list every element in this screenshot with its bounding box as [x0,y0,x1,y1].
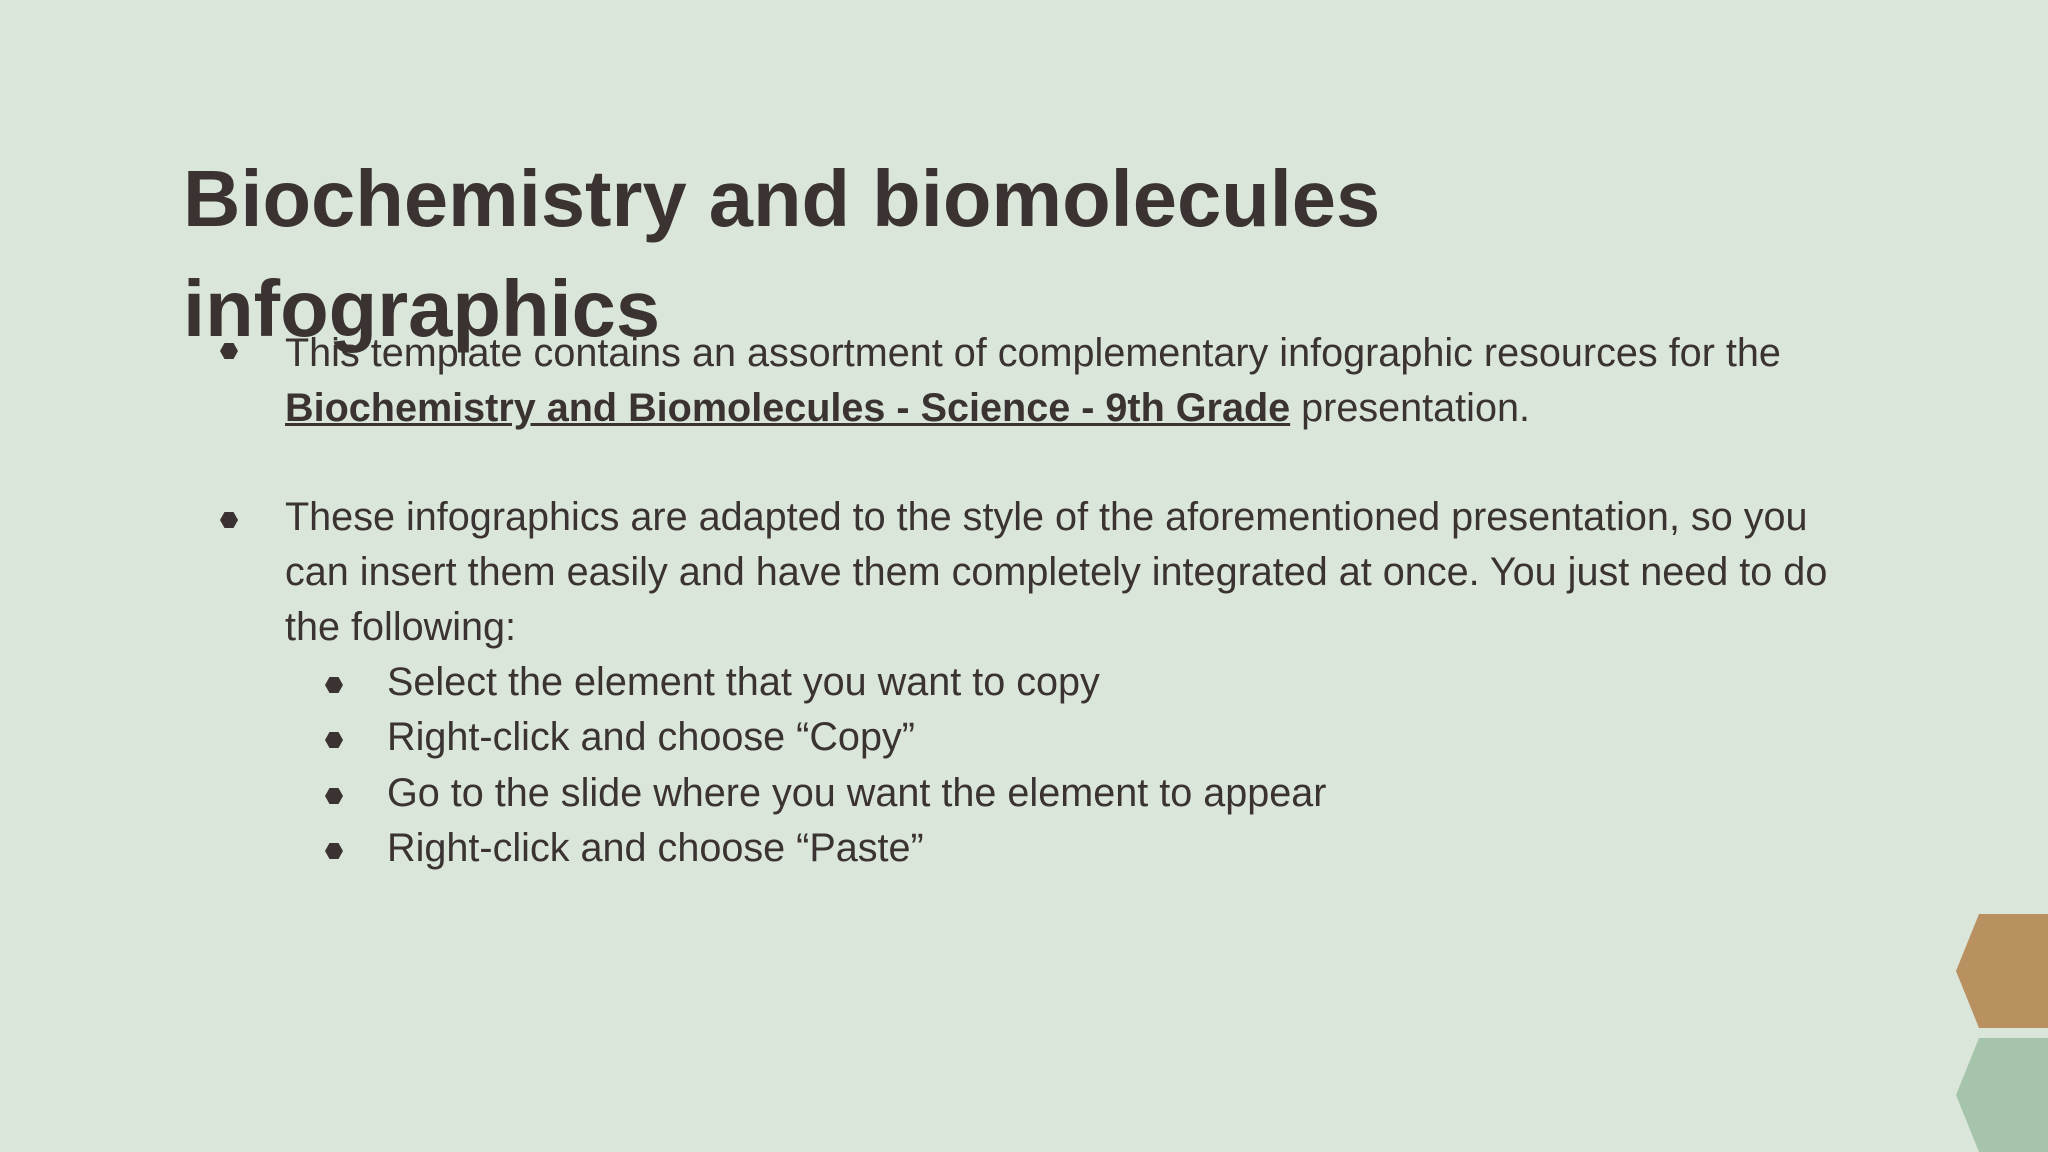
title [183,154,1380,353]
bullet 1: Biochemistry and Biomolecules - Science - 9th Grade presentation. [285,386,1530,430]
bullet list [220,331,1827,870]
sub-bullets: steps: Right-click and choose “Copy” [387,715,915,759]
bullet 2 [220,495,1827,649]
bullet 2: the following: [285,605,516,649]
sub-bullets: steps: Go to the slide where you want the element to appear [387,771,1326,815]
bullet 1 [220,331,1781,430]
bullet 2: These infographics are adapted to the style of the aforementioned presentation, so you [285,495,1808,539]
title: infographics [183,264,660,353]
decorative hexagon: green [1956,1038,2048,1152]
bullet 2: can insert them easily and have them completely integrated at once. You just need to do [285,550,1827,594]
sub-bullets: steps [325,660,1326,870]
decorative hexagon: tan [1956,914,2048,1028]
bullet 1: This template contains an assortment of complementary infographic resources for the [285,331,1781,375]
sub-bullets: steps: Right-click and choose “Paste” [387,826,924,870]
title: Biochemistry and biomolecules [183,154,1380,243]
sub-bullets: steps: Select the element that you want to copy [387,660,1100,704]
